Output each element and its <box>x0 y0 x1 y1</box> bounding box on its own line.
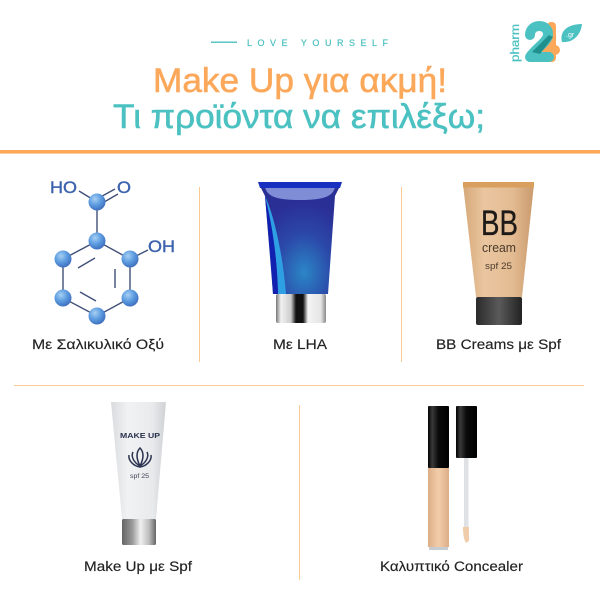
logo: pharm24.gr <box>510 22 582 62</box>
icon: blue LHA tube <box>258 182 342 323</box>
label: make up with spf: Make Up με Spf <box>84 559 192 574</box>
icon: salicylic acid molecule: OH <box>148 237 175 256</box>
icon: salicylic acid molecule: HO <box>50 178 77 197</box>
label: BB creams: BB Creams με Spf <box>436 337 561 352</box>
label: salicylic acid: Με Σαλικυλικό Οξύ <box>32 337 164 352</box>
icon: salicylic acid molecule: O <box>117 178 131 197</box>
title: Τι προϊόντα να επιλέξω; <box>113 98 485 136</box>
icon: white make up tube: MAKE UP <box>120 431 160 440</box>
logo: pharm24.gr: .gr <box>566 32 575 39</box>
icon: white make up tube <box>111 402 166 545</box>
title <box>113 62 485 136</box>
icon: BB cream tube: BB <box>481 204 518 243</box>
icon: concealer tube and wand <box>428 406 477 550</box>
icon: white make up tube: spf 25 <box>130 474 150 480</box>
logo: pharm24.gr: pharm <box>510 24 522 62</box>
icon: BB cream tube: cream <box>482 241 516 255</box>
label: concealer: Καλυπτικό Concealer <box>380 559 524 574</box>
eyebrow: Love Yourself: LOVE YOURSELF <box>247 38 388 48</box>
label: LHA: Με LHA <box>273 337 327 352</box>
icon: salicylic acid molecule <box>50 178 175 324</box>
icon: BB cream tube <box>463 182 534 325</box>
icon: BB cream tube: spf 25 <box>485 261 512 271</box>
title: Make Up για ακμή! <box>153 62 447 100</box>
